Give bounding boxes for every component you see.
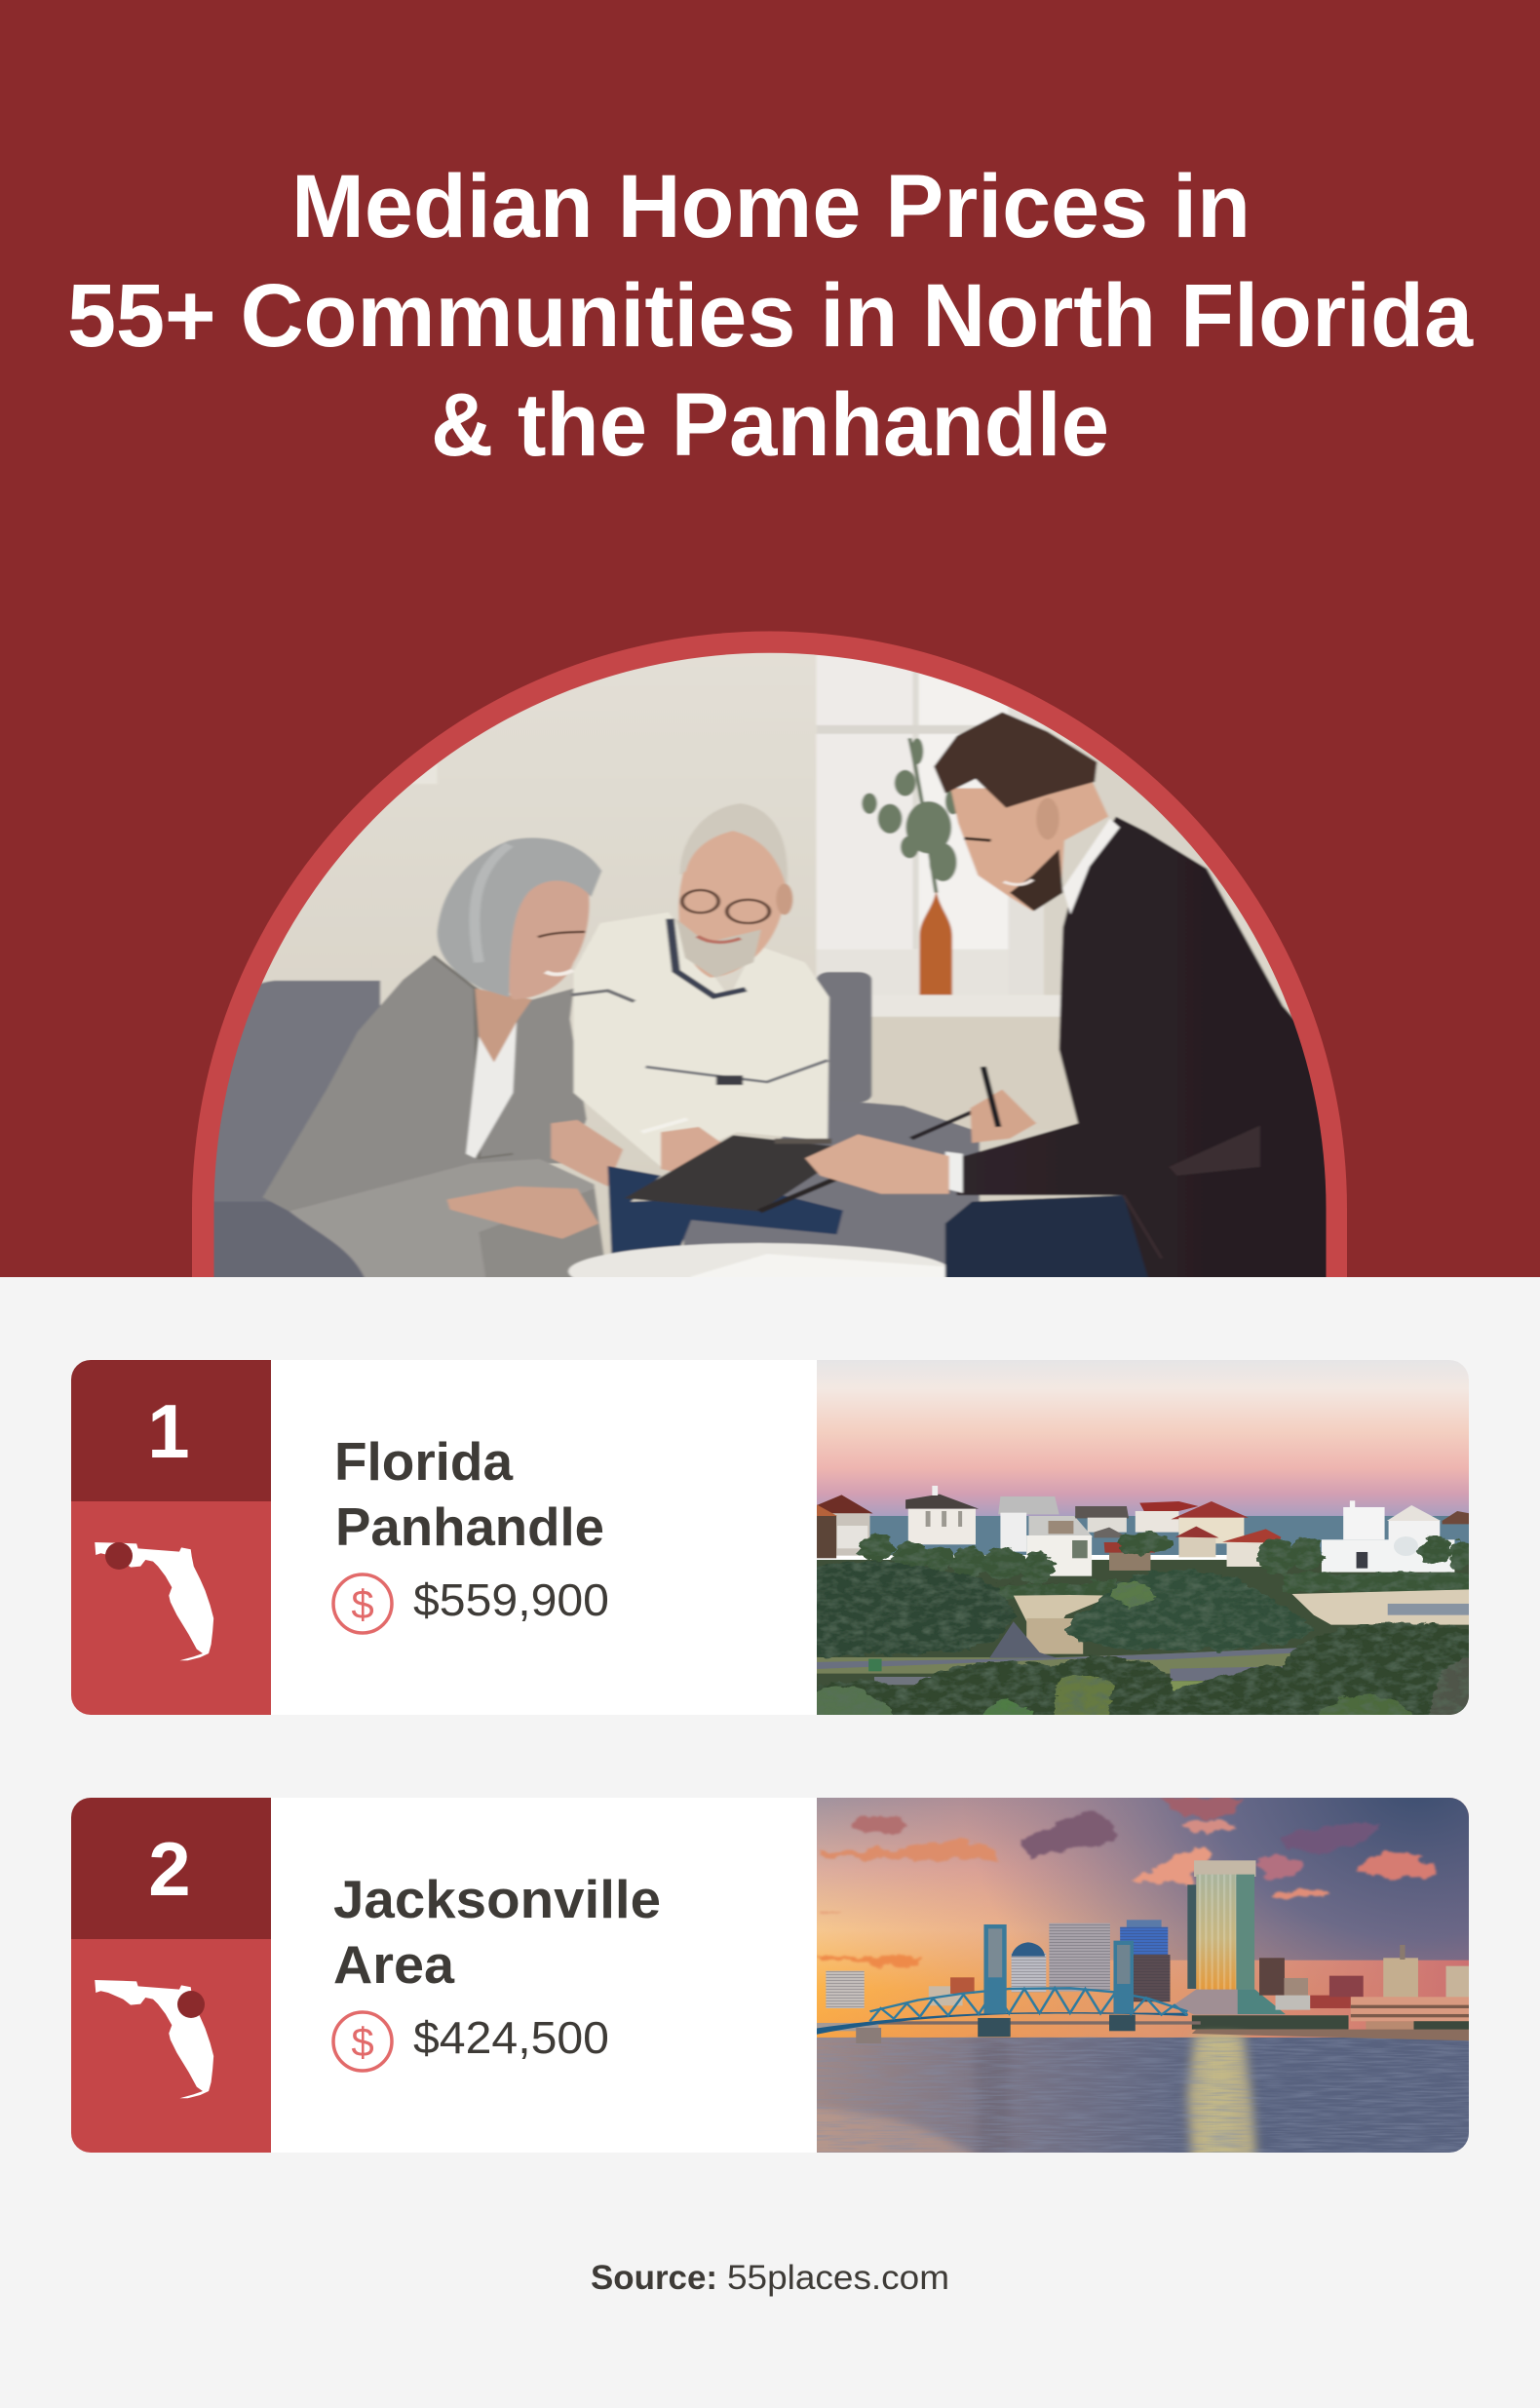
- card 1 number: 1: [147, 1388, 190, 1474]
- card 1 number block: [71, 1360, 271, 1715]
- card 2 heading: Jacksonville: [333, 1869, 661, 1929]
- card 2 dollar icon: [333, 2012, 392, 2071]
- hero arch ring: [192, 632, 1347, 1277]
- card 1 dollar icon: $: [351, 1581, 374, 1627]
- source line: Source:: [591, 2259, 717, 2297]
- card 2 number block: [71, 1798, 271, 2153]
- title: [67, 157, 1474, 475]
- card 1 Florida map icon with panhandle marker: [95, 1542, 213, 1660]
- card 2 number: 2: [148, 1826, 191, 1912]
- card 1 heading: [334, 1431, 604, 1557]
- header panel: [0, 0, 1540, 1277]
- card 2 heading: [333, 1869, 661, 1995]
- card 1 heading: Florida: [334, 1431, 513, 1492]
- source line: [591, 2259, 949, 2297]
- card 1 photo: panhandle coast homes: [809, 1360, 1487, 1732]
- source line: 55places.com: [727, 2259, 949, 2297]
- card 1: [71, 1360, 1487, 1732]
- card 2 price: $424,500: [413, 2012, 609, 2063]
- card 1 white body: [71, 1360, 1469, 1715]
- card 2 white body: [71, 1798, 1469, 2153]
- hero photo: couple with agent: [214, 653, 1326, 1277]
- card 1 dollar icon: [333, 1574, 392, 1633]
- card 1 price: $559,900: [413, 1574, 609, 1625]
- card 2 heading: Area: [333, 1934, 454, 1995]
- card 2 photo: Jacksonville skyline: [817, 1798, 1469, 2153]
- card 2: [71, 1798, 1487, 2167]
- title: & the Panhandle: [431, 375, 1109, 475]
- title: Median Home Prices in: [291, 157, 1251, 256]
- card 2 dollar icon: $: [351, 2019, 374, 2065]
- card 2 Florida map icon with Jacksonville marker: [95, 1980, 213, 2098]
- title: 55+ Communities in North Florida: [67, 266, 1474, 366]
- card 1 heading: Panhandle: [335, 1496, 604, 1557]
